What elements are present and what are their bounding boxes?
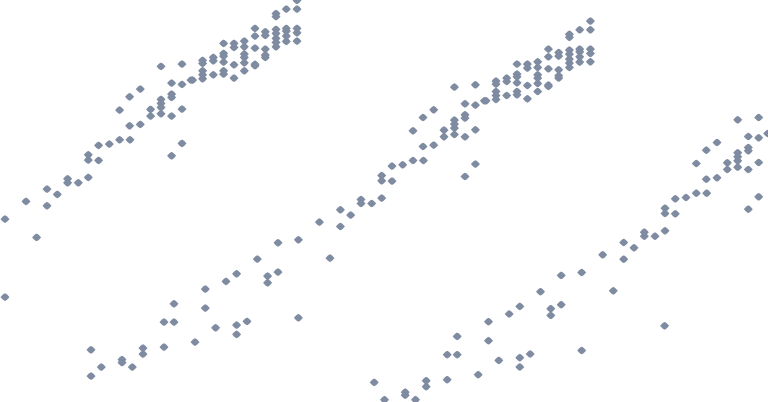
upper scatter band: right copy — [577, 50, 768, 354]
lower scatter band: left copy — [86, 239, 282, 380]
isolated diamond point — [660, 322, 669, 330]
upper scatter band: middle copy — [294, 17, 595, 322]
upper scatter band: left copy — [0, 0, 301, 301]
lower scatter band: right copy — [370, 272, 566, 402]
